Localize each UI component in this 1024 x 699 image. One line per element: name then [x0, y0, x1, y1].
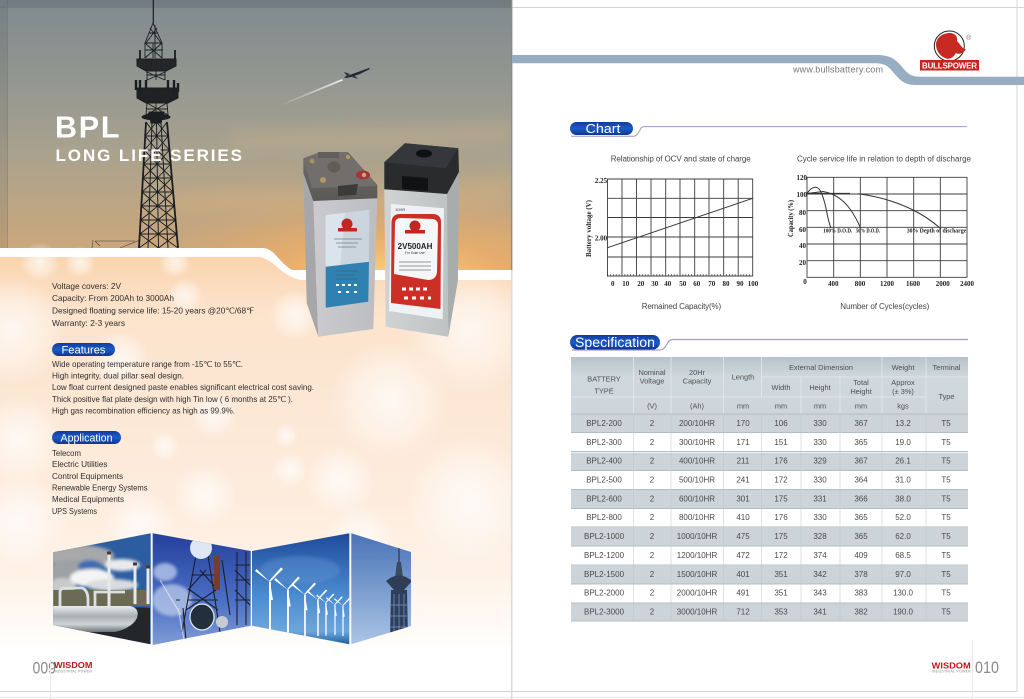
axis labels: 2000 [936, 280, 950, 288]
row BPL2-1500: 97.0 [895, 570, 911, 579]
row BPL2-1000: 365 [854, 532, 868, 541]
row BPL2-500: 31.0 [895, 475, 911, 484]
row BPL2-1500: 401 [736, 570, 750, 579]
row BPL2-200: 330 [813, 419, 827, 428]
row BPL2-200: 170 [736, 419, 750, 428]
table header [571, 357, 968, 414]
page number: 010: 010 [975, 659, 999, 677]
row BPL2-1200: 472 [736, 551, 750, 560]
row BPL2-400 [586, 456, 951, 466]
row BPL2-800: 330 [813, 513, 827, 522]
table header: BATTERY [587, 374, 621, 384]
text block: features: High gas recombination efficiency as high as 99.9%. [52, 406, 235, 416]
axis labels: 80 [799, 209, 806, 217]
row BPL2-300: 2 [650, 438, 655, 447]
row BPL2-1000: 175 [774, 532, 788, 541]
chart: OCV vs state of charge [585, 155, 759, 311]
axis labels [787, 174, 974, 311]
table header: (± 3%) [892, 387, 914, 396]
text block: key specs: Capacity: From 200Ah to 3000Ah [52, 293, 174, 303]
row BPL2-200: 367 [854, 419, 868, 428]
title: BPL long life series: BPL [55, 110, 120, 144]
axis labels: 10 [622, 280, 630, 288]
row BPL2-500: 172 [774, 475, 788, 484]
row BPL2-200: T5 [941, 419, 951, 428]
row BPL2-1000: T5 [941, 532, 951, 541]
website url: www.bullsbattery.com [792, 64, 883, 74]
row BPL2-400: 329 [813, 456, 827, 466]
row BPL2-1000: 2 [650, 532, 655, 541]
axis labels: 1600 [906, 280, 920, 288]
row BPL2-600: 2 [650, 494, 655, 503]
table header: Terminal [933, 363, 961, 372]
heading: Features: Features [62, 344, 106, 356]
axis labels: 2.00 [595, 234, 608, 242]
title: BPL long life series: LONG LIFE SERIES [56, 146, 242, 165]
row BPL2-1000: 328 [813, 532, 827, 541]
row BPL2-2000: 2000/10HR [677, 588, 717, 598]
heading: Specification: Specification [575, 335, 655, 350]
axis labels: Battery voltage (V) [585, 199, 593, 257]
table header: Weight [892, 363, 914, 372]
heading: Application: Application [60, 432, 112, 444]
row BPL2-800: T5 [941, 513, 951, 522]
peach background panel [0, 244, 511, 630]
heading: Application [52, 431, 121, 444]
axis labels: 90 [736, 280, 744, 288]
chart: cycle life vs depth of discharge [787, 155, 974, 311]
row BPL2-500: 241 [736, 475, 750, 484]
row BPL2-400: 2 [650, 456, 655, 466]
row BPL2-2000: 491 [736, 588, 750, 598]
table header: mm [855, 402, 867, 410]
axis labels: 800 [855, 280, 866, 288]
text block: applications: Control Equipments [52, 472, 123, 481]
panel: right page header [512, 31, 1024, 85]
row BPL2-3000: 712 [736, 608, 750, 616]
axis labels: 20 [799, 259, 806, 267]
data line [608, 198, 753, 248]
row BPL2-1500: BPL2-1500 [584, 570, 625, 579]
row BPL2-1500: 342 [813, 570, 827, 579]
row BPL2-2000: 130.0 [893, 588, 914, 598]
row BPL2-3000: T5 [941, 608, 951, 616]
text block: features: Wide operating temperature range from -15℃ to 55℃. [52, 359, 243, 369]
axis labels: Remained Capacity(%) [642, 302, 722, 311]
text block: key specs: Designed floating service life: 15-20 years @20℃/68℉ [52, 306, 254, 316]
axis labels: 40 [664, 280, 672, 288]
title: BPL long life series [56, 116, 242, 161]
row BPL2-600: BPL2-600 [586, 494, 622, 503]
row BPL2-300: 151 [774, 438, 788, 447]
row BPL2-600: 366 [854, 494, 868, 503]
axis labels: 0 [611, 280, 615, 288]
axis labels: Number of Cycles(cycles) [840, 302, 930, 311]
table header: (Ah) [690, 402, 704, 410]
row BPL2-1500: 1500/10HR [677, 570, 717, 579]
table header: (V) [647, 402, 657, 410]
row BPL2-400: 26.1 [895, 456, 911, 466]
row BPL2-800 [586, 513, 951, 522]
heading: Chart: Chart [586, 121, 621, 136]
table header: Nominal [638, 368, 666, 377]
row BPL2-300 [586, 438, 951, 447]
heading: Chart [570, 121, 967, 136]
axis labels: 70 [708, 280, 716, 288]
axis labels: 120 [796, 174, 807, 182]
axis labels: 20 [637, 280, 645, 288]
row BPL2-600: T5 [941, 494, 951, 503]
row BPL2-300: BPL2-300 [586, 438, 622, 447]
text block: features: High integrity, dual pillar seal design. [52, 370, 184, 380]
row BPL2-400: 176 [774, 456, 788, 466]
table header: 20Hr [689, 368, 706, 377]
logo: WISDOM left: INDUSTRIAL POWER [54, 670, 93, 674]
text block: applications: UPS Systems [52, 507, 97, 516]
table header: Height [850, 387, 872, 396]
icon: telecom tower [92, 0, 178, 248]
row BPL2-400: BPL2-400 [586, 456, 622, 466]
row BPL2-1200: BPL2-1200 [584, 551, 625, 560]
icon: black battery with red label: For Solar Use [405, 251, 425, 255]
table header: Type [938, 392, 955, 401]
row BPL2-800: BPL2-800 [586, 513, 622, 522]
table header: Approx [891, 378, 915, 387]
table header: TYPE [594, 386, 614, 396]
row BPL2-300: 171 [736, 438, 750, 447]
row BPL2-3000: 2 [650, 608, 655, 616]
row BPL2-800: 176 [774, 513, 788, 522]
row BPL2-500: 2 [650, 475, 655, 484]
curve labels: 50% D.O.D. [856, 228, 880, 235]
row BPL2-500: 500/10HR [679, 475, 715, 484]
table header: External Dimension [789, 363, 853, 372]
icon: grey battery [303, 152, 377, 337]
text block: applications: Electric Utilities [52, 460, 108, 469]
text block: applications [52, 449, 148, 516]
axis labels: 1200 [880, 280, 894, 288]
row BPL2-200: 200/10HR [679, 419, 715, 428]
row BPL2-2000: T5 [941, 588, 951, 598]
chart: cycle life vs depth of discharge: Cycle service life in relation to depth of discharge [797, 155, 972, 164]
axis labels: 40 [799, 242, 806, 250]
table header: mm [775, 402, 787, 410]
text block: key specs: Warranty: 2-3 years [52, 318, 125, 328]
row BPL2-2000: 383 [854, 588, 868, 598]
row BPL2-500: 330 [813, 475, 827, 484]
white wave band [0, 248, 511, 280]
row BPL2-400: 211 [737, 456, 750, 466]
row BPL2-1000: BPL2-1000 [584, 532, 625, 541]
row BPL2-600: 38.0 [895, 494, 911, 503]
row BPL2-1000: 475 [736, 532, 750, 541]
row BPL2-2000: 351 [774, 588, 788, 598]
row BPL2-300: T5 [941, 438, 951, 447]
frame lines [0, 0, 511, 248]
header wave band [512, 55, 1024, 85]
axis labels: 100 [796, 191, 807, 199]
row BPL2-3000 [584, 608, 951, 616]
icon: black battery with red label [384, 143, 459, 337]
row BPL2-600: 301 [736, 494, 750, 503]
row BPL2-400: 400/10HR [679, 456, 715, 466]
table header: Length [732, 372, 754, 382]
table header: Capacity [683, 376, 712, 386]
panel: wind turbines photo [252, 533, 351, 645]
row BPL2-1200: 1200/10HR [677, 551, 717, 560]
table header: Voltage [640, 376, 664, 386]
row BPL2-200 [586, 419, 951, 428]
row BPL2-300: 365 [854, 438, 868, 447]
axis labels: 60 [693, 280, 701, 288]
heading: Features [52, 343, 115, 356]
text block: key specs: Voltage covers: 2V [52, 281, 121, 291]
icon: airplane and contrail [279, 68, 370, 105]
logo: WISDOM left: WISDOM [54, 660, 92, 670]
row BPL2-1200: 374 [813, 551, 827, 560]
row BPL2-1500: 2 [650, 570, 655, 579]
table header: mm [737, 402, 749, 410]
logo: Bullspower: BULLSPOWER [922, 61, 977, 70]
logo: WISDOM right [932, 660, 971, 674]
row BPL2-200: 13.2 [895, 419, 911, 428]
row BPL2-1200: T5 [941, 551, 951, 560]
row BPL2-1000 [584, 532, 951, 541]
text block: applications: Telecom [52, 449, 81, 458]
page gutter [511, 0, 513, 270]
axis labels: 80 [722, 280, 730, 288]
row BPL2-300: 330 [813, 438, 827, 447]
row BPL2-800: 410 [736, 513, 750, 522]
row BPL2-300: 19.0 [895, 438, 911, 447]
row BPL2-600: 175 [774, 494, 788, 503]
curve labels [823, 228, 966, 235]
row BPL2-800: 2 [650, 513, 655, 522]
icon: black battery with red label: 2V500AH [398, 242, 433, 251]
row BPL2-3000: 3000/10HR [677, 608, 717, 616]
row BPL2-600: 331 [813, 494, 827, 503]
row BPL2-1500 [584, 570, 951, 579]
axis labels: 0 [803, 278, 807, 286]
text block: applications: Medical Equipments [52, 495, 124, 504]
row BPL2-1000: 1000/10HR [677, 532, 717, 541]
logo: WISDOM left [54, 662, 92, 672]
row BPL2-400: T5 [941, 456, 951, 466]
plot grid [807, 177, 967, 277]
axis labels: 60 [799, 226, 806, 234]
curve labels: 30% Depth of discharge [907, 228, 966, 235]
text block: features [52, 359, 314, 416]
axis labels: 30 [651, 280, 659, 288]
row BPL2-1200: 172 [774, 551, 788, 560]
table header: Height [809, 383, 831, 392]
table header: Total [853, 378, 869, 387]
row BPL2-2000: 2 [650, 588, 655, 598]
row BPL2-800: 800/10HR [679, 513, 715, 522]
row BPL2-1500: 351 [774, 570, 788, 579]
row BPL2-1000: 62.0 [895, 532, 911, 541]
page number: 009: 009 [32, 660, 56, 678]
specification table [571, 357, 968, 621]
axis labels: 2400 [960, 280, 974, 288]
table header: mm [814, 402, 826, 410]
row BPL2-500: T5 [941, 475, 951, 484]
panel: left page [0, 0, 511, 674]
row BPL2-2000: 343 [813, 588, 827, 598]
axis labels: Capacity (%) [787, 199, 795, 237]
text block: features: Thick positive flat plate design with high Tin low ( 6 months at 25℃ ). [52, 394, 293, 404]
axis labels: 50 [679, 280, 687, 288]
text block: features: Low float current designed paste enables significant electrical cost saving. [52, 382, 314, 392]
row BPL2-400: 367 [854, 456, 868, 466]
row BPL2-600: 600/10HR [679, 494, 715, 503]
table header: Width [772, 383, 790, 392]
table rows [571, 414, 968, 621]
row BPL2-500: BPL2-500 [586, 475, 622, 484]
row BPL2-2000: BPL2-2000 [584, 588, 625, 598]
row BPL2-1200: 409 [854, 551, 868, 560]
panel: industrial photo [46, 533, 151, 645]
row BPL2-3000: 382 [854, 608, 868, 616]
axis labels: 100 [748, 280, 759, 288]
logo: Bullspower: ® [966, 34, 972, 42]
plot grid [608, 179, 753, 276]
row BPL2-1200: 2 [650, 551, 655, 560]
chart: OCV vs state of charge: Relationship of OCV and state of charge [611, 155, 751, 164]
row BPL2-300: 300/10HR [679, 438, 715, 447]
row BPL2-200: 2 [650, 419, 655, 428]
row BPL2-3000: 341 [813, 608, 827, 616]
table header: kgs [897, 402, 909, 410]
heading: Specification [570, 335, 968, 350]
text block: applications: Renewable Energy Systems [52, 484, 148, 492]
panel: telecom antennas photo [152, 533, 251, 645]
logo: WISDOM right: WISDOM [932, 660, 971, 670]
panel: observation tower photo [351, 533, 412, 645]
row BPL2-600 [586, 494, 951, 503]
row BPL2-2000 [584, 588, 951, 598]
row BPL2-500: 364 [854, 475, 868, 484]
logo: Bullspower [920, 31, 979, 70]
axis labels [585, 177, 759, 311]
sky background [0, 0, 511, 270]
row BPL2-1500: 378 [854, 570, 868, 579]
row BPL2-800: 52.0 [895, 513, 911, 522]
row BPL2-1200: 68.5 [895, 551, 911, 560]
logo: WISDOM right: INDUSTRIAL POWER [932, 670, 971, 674]
axis labels: 2.25 [595, 177, 608, 185]
row BPL2-3000: 353 [774, 608, 788, 616]
row BPL2-800: 365 [854, 513, 868, 522]
row BPL2-500 [586, 475, 951, 484]
row BPL2-1200 [584, 551, 951, 560]
axis labels: 400 [828, 280, 839, 288]
row BPL2-200: BPL2-200 [586, 419, 622, 428]
row BPL2-3000: BPL2-3000 [584, 608, 625, 616]
row BPL2-1500: T5 [941, 570, 951, 579]
curve labels: 100% D.O.D. [823, 228, 853, 235]
icon: black battery with red label: 10HR [395, 207, 405, 212]
row BPL2-3000: 190.0 [893, 608, 914, 616]
row BPL2-200: 106 [774, 419, 788, 428]
text block: key specs [52, 281, 254, 328]
discharge curves [807, 187, 940, 228]
